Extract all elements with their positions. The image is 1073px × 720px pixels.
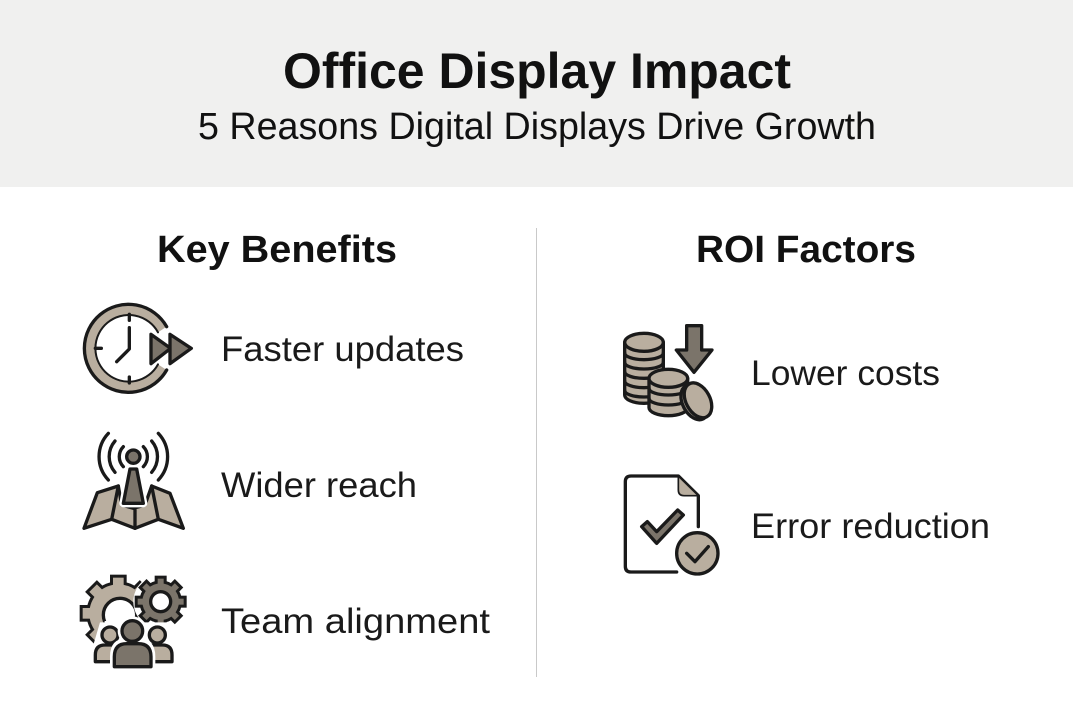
label: team alignment: Team alignment xyxy=(221,601,490,641)
heading: ROI factors: ROI Factors xyxy=(696,229,916,271)
header band xyxy=(0,0,1073,187)
panel: key benefits xyxy=(80,229,490,670)
label: error reduction: Error reduction xyxy=(751,506,990,546)
heading: key benefits: Key Benefits xyxy=(157,229,397,271)
subtitle: 5 Reasons Digital Displays Drive Growth xyxy=(198,106,876,148)
panel: ROI factors xyxy=(625,229,990,574)
small gear xyxy=(133,574,188,629)
team members xyxy=(93,616,172,670)
large gear xyxy=(80,575,157,658)
label: lower costs: Lower costs xyxy=(751,353,940,393)
label: faster updates: Faster updates xyxy=(221,329,464,369)
icon: gears and team xyxy=(80,574,188,670)
icon: document with check marks xyxy=(625,476,718,574)
label: wider reach: Wider reach xyxy=(221,465,417,505)
title: Office Display Impact xyxy=(283,43,791,99)
icon: coin stacks with down arrow xyxy=(625,326,717,424)
icon: clock with fast-forward xyxy=(84,304,191,392)
icon: broadcast tower over map xyxy=(84,433,183,528)
